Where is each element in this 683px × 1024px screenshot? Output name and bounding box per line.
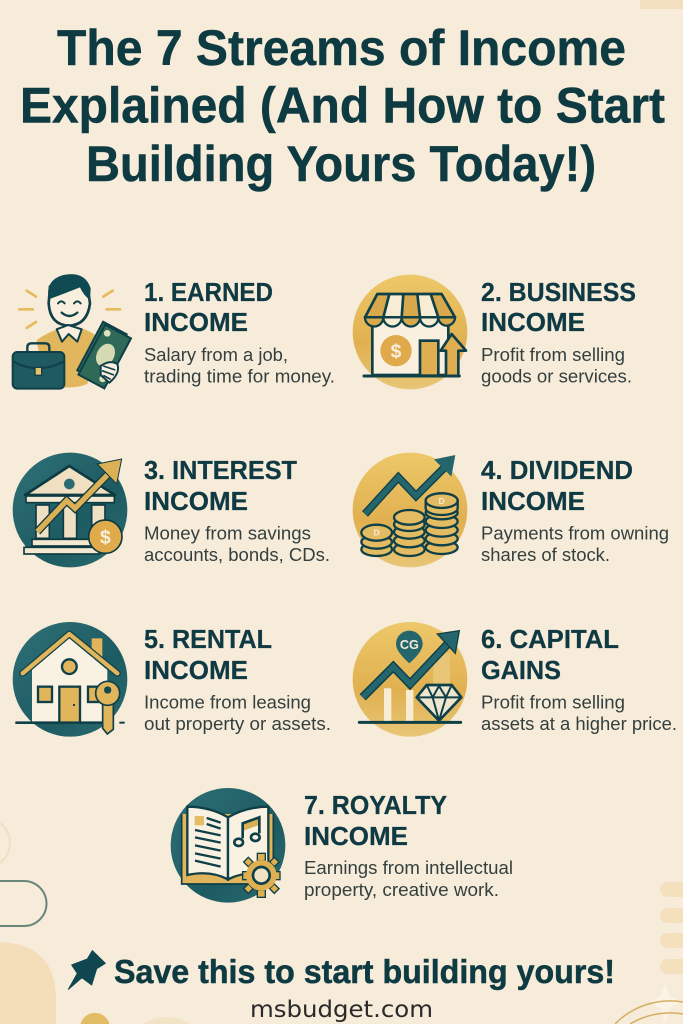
heading: INCOME [481,309,585,337]
heading [481,279,636,337]
heading [481,457,633,516]
title [20,20,665,192]
description: assets at a higher price. [481,714,677,734]
icon: person with briefcase and cash [13,274,131,389]
heading: 6. CAPITAL [481,626,619,654]
icon: storefront [353,275,467,389]
description [481,524,669,565]
icon: bank with rising arrow [13,453,127,567]
description [144,345,335,386]
heading: 3. INTEREST [144,457,297,485]
description: trading time for money. [144,366,335,386]
icon: book with music note and gear [171,788,285,903]
heading [304,792,447,851]
heading [144,626,272,685]
description [481,692,677,734]
description: Payments from owning [481,524,669,544]
title: The 7 Streams of Income [57,20,626,76]
panel: 3. interest income [13,453,330,567]
description: Money from savings [144,524,311,544]
description: Earnings from intellectual [304,858,513,878]
icon: coin stacks and arrow [353,453,467,567]
icon: storefront: $ [391,341,402,362]
icon: coin stacks and arrow: D [374,528,380,538]
heading: INCOME [144,488,248,516]
panel: 6. capital gains [353,622,677,737]
description [144,692,331,734]
heading: INCOME [481,488,585,516]
heading: 4. DIVIDEND [481,457,633,485]
heading: INCOME [144,657,248,685]
description [481,345,632,386]
heading: INCOME [144,309,248,337]
icon: chart with diamond [353,622,467,737]
title: Explained (And How to Start [20,78,665,134]
icon: house with key [13,622,127,737]
heading: 2. BUSINESS [481,279,636,307]
panel: 1. earned income [13,274,335,389]
description: goods or services. [481,366,632,386]
description: property, creative work. [304,880,499,900]
website url: msbudget.com [250,997,433,1023]
heading: INCOME [304,823,408,851]
description [144,524,330,565]
panel: 7. royalty income [171,788,513,903]
description [304,858,513,900]
heading: 5. RENTAL [144,626,272,654]
icon: bank with rising arrow: $ [100,528,111,549]
description: shares of stock. [481,545,610,565]
icon: push pin [68,951,105,989]
heading [144,279,273,337]
title: Building Yours Today!) [86,136,596,192]
call to action [68,951,615,990]
heading [481,626,619,685]
heading: 1. EARNED [144,279,273,307]
heading: GAINS [481,657,561,685]
description: accounts, bonds, CDs. [144,545,330,565]
call to action text: Save this to start building yours! [114,953,615,990]
heading: 7. ROYALTY [304,792,447,820]
description: Profit from selling [481,345,625,365]
panel: 2. business income [353,275,636,389]
icon: coin stacks and arrow: D [439,496,445,506]
panel: 5. rental income [13,622,331,737]
icon: chart with diamond: CG [400,638,419,652]
description: Income from leasing [144,692,311,712]
description: Salary from a job, [144,345,288,365]
panel: 4. dividend income [353,453,669,567]
heading [144,457,297,516]
description: out property or assets. [144,714,331,734]
description: Profit from selling [481,692,625,712]
